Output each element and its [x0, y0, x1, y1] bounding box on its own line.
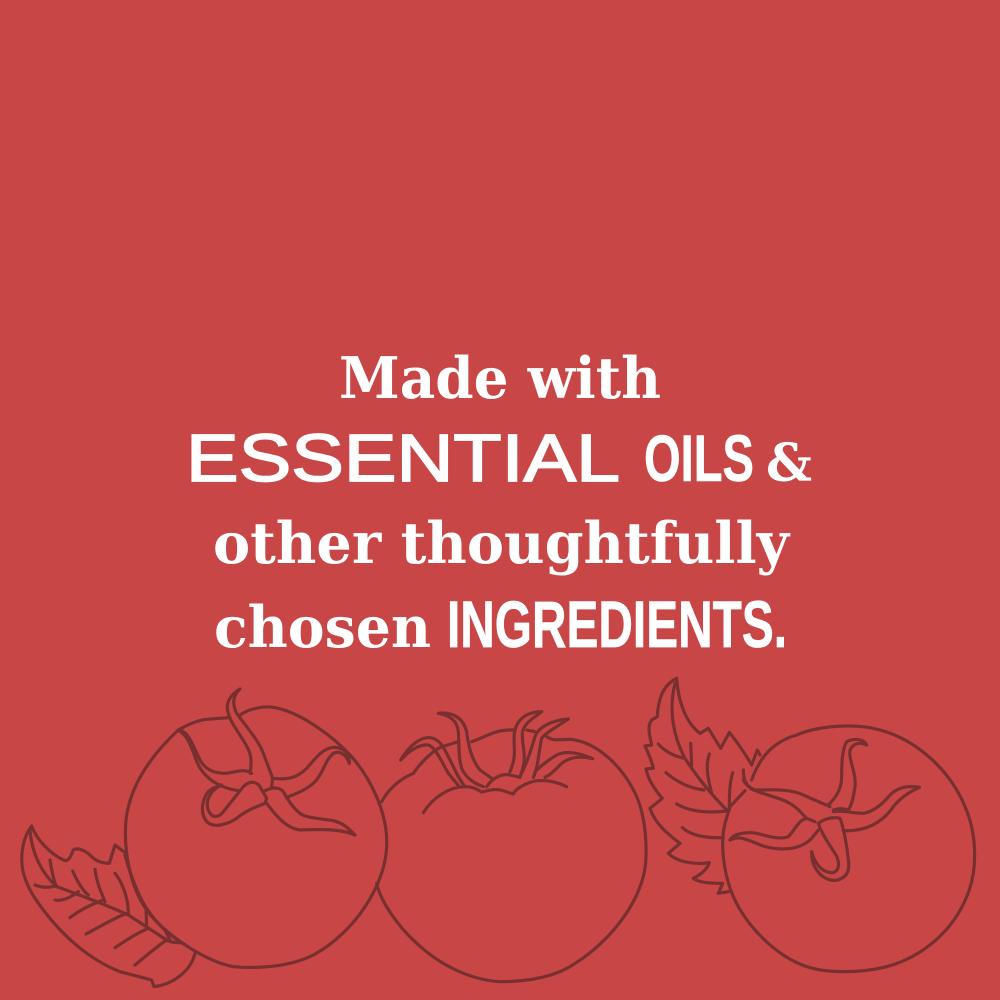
line 4: INGREDIENTS.: INGREDIENTS. [447, 587, 787, 661]
illustration: middle tomato [377, 712, 646, 982]
leaf: right [645, 678, 760, 893]
line 2: ESSENTIAL: ESSENTIAL [186, 421, 620, 496]
tomato stem: left [178, 689, 355, 835]
tomato body: middle [377, 730, 646, 982]
line 2: ampersand: & [766, 433, 812, 494]
tomato stem: middle [401, 712, 593, 813]
tomato body: right [723, 726, 975, 972]
line 2: OILS: OILS [644, 421, 754, 495]
line 1: Made with: Made with [339, 345, 661, 412]
leaf: left [22, 826, 195, 987]
tomato stem: right [730, 739, 919, 880]
tomato body: left [125, 707, 387, 967]
line 3: other thoughtfully: other thoughtfully [213, 510, 791, 577]
illustration: right tomato with leaf [645, 678, 975, 972]
line 4: chosen: chosen [214, 594, 431, 661]
headline text block [186, 345, 812, 661]
illustration: left tomato with leaf [22, 689, 387, 987]
